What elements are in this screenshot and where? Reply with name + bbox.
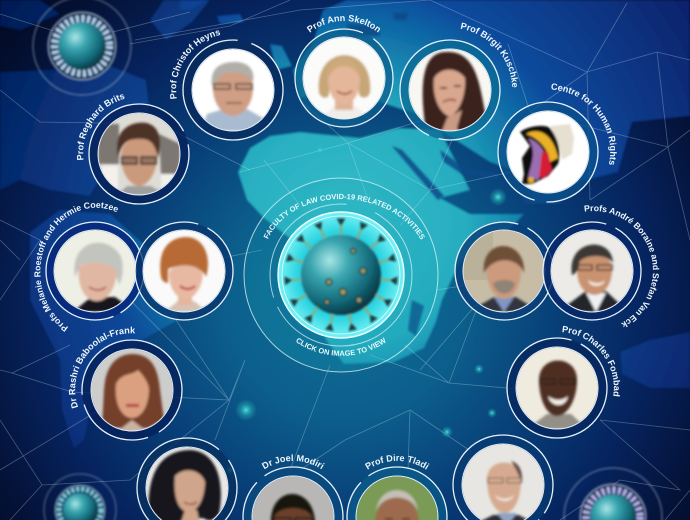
- icon: small virus bottom right: [564, 468, 662, 520]
- portrait: man bottom right: [453, 435, 553, 520]
- logo: Centre for Human Rights: [498, 102, 598, 202]
- portrait: Prof Stefan Van Eck: [543, 222, 641, 320]
- portrait: Prof André Boraine: [455, 222, 553, 320]
- label: Prof Ann Skelton: Prof Ann Skelton: [306, 15, 380, 32]
- label: Prof Dire Tladi: Prof Dire Tladi: [364, 454, 430, 470]
- centre virus image: [244, 178, 438, 372]
- portrait: Prof Reghard Brits: [89, 104, 189, 204]
- portrait: Prof Dire Tladi: [347, 467, 447, 520]
- portrait: Prof Charles Fombad: [507, 338, 607, 438]
- portrait: woman bottom left: [137, 438, 237, 520]
- portrait: Prof Melanie Roestoff: [46, 222, 144, 320]
- glowing dots: [225, 146, 507, 475]
- portrait: Prof Christof Heyns: [183, 40, 283, 140]
- label: Prof Birgit Kuschke: Prof Birgit Kuschke: [460, 22, 518, 88]
- label: Prof Christof Heyns: Prof Christof Heyns: [170, 30, 220, 99]
- map: Greenland and top left: [0, 0, 210, 40]
- caption: centre bottom: CLICK ON IMAGE TO VIEW: [296, 337, 386, 356]
- label: Centre for Human Rights: Centre for Human Rights: [551, 84, 617, 165]
- portrait: Prof Birgit Kuschke: [400, 40, 500, 140]
- label: Prof Reghard Brits: Prof Reghard Brits: [77, 94, 124, 160]
- map: UK and Iceland: [180, 0, 292, 70]
- portrait: Prof Hermie Coetzee: [135, 222, 233, 320]
- label: Dr Joel Modiri: Dr Joel Modiri: [262, 454, 325, 470]
- map: inland seas: [347, 13, 572, 336]
- map: South America: [30, 210, 178, 448]
- label: Dr Rashri Baboolal-Frank: Dr Rashri Baboolal-Frank: [68, 326, 135, 408]
- caption: centre top: FACULTY OF LAW COVID-19 RELATED ACTIVITIES: [264, 194, 425, 240]
- map: Africa, Arabia and Asia: [238, 0, 690, 364]
- portrait: Prof Ann Skelton: [295, 29, 393, 127]
- label: Prof Charles Fombad: Prof Charles Fombad: [562, 326, 620, 396]
- portrait: Dr Rashri Baboolal-Frank: [82, 340, 182, 440]
- icon: small virus top left: [33, 0, 131, 95]
- map: North America: [0, 66, 150, 196]
- map: Australia: [620, 332, 690, 388]
- label: Profs André Boraine and Stefan Van Eck: Profs André Boraine and Stefan Van Eck: [584, 205, 660, 328]
- label: Profs Melanie Roestoff and Hermie Coetzee: Profs Melanie Roestoff and Hermie Coetzee: [34, 202, 118, 332]
- portrait: Dr Joel Modiri: [243, 467, 343, 520]
- icon: small virus bottom left: [44, 474, 116, 520]
